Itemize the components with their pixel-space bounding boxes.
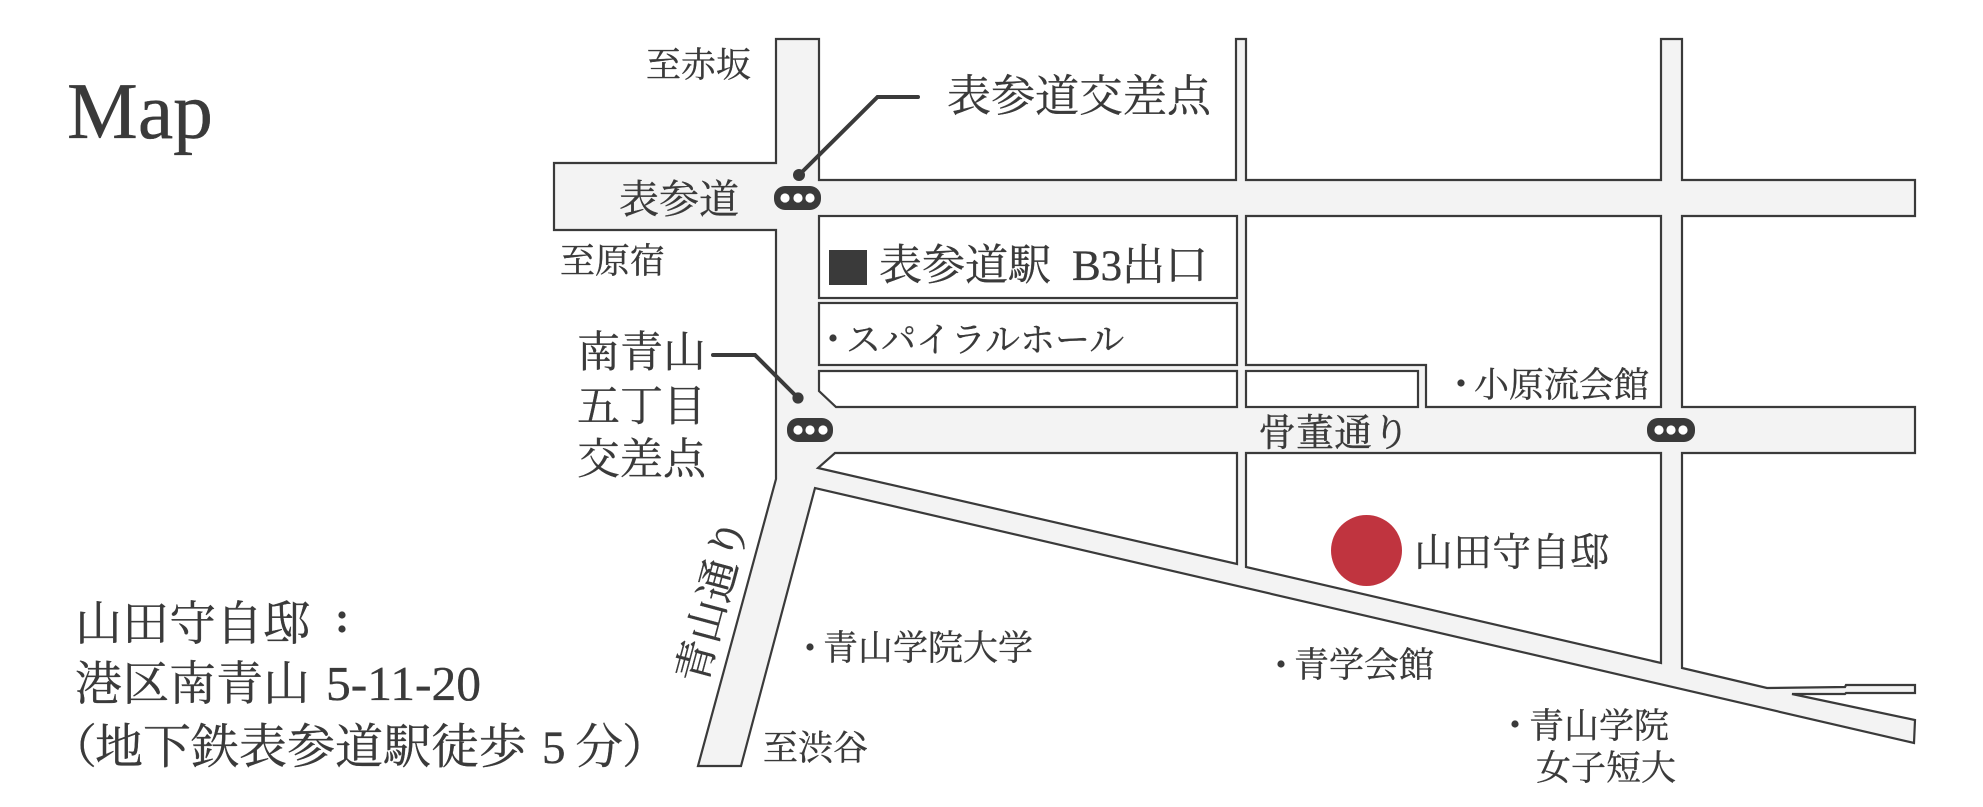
label: Aoyama-dori: 青山通り xyxy=(670,514,758,688)
address line 3: ） xyxy=(622,722,669,774)
address block xyxy=(50,599,669,774)
label: station exit: 出口 xyxy=(1122,243,1208,290)
label: Ohara Kaikan: 小原流会館 xyxy=(1474,366,1649,405)
label: Omotesando crossing: 表参道交差点 xyxy=(947,72,1212,121)
label: Aoyama Gakuin Women's Junior College xyxy=(1511,707,1676,788)
address line 3: 分 xyxy=(575,721,623,774)
address line 3: 地下鉄表参道駅徒歩 xyxy=(95,721,527,774)
label: Minami-Aoyama 5-chome crossing: 五丁目 xyxy=(577,384,706,431)
destination marker xyxy=(1331,515,1402,586)
traffic signal: Kotto-dori east xyxy=(1647,418,1695,442)
address line 3: 5 xyxy=(542,722,566,774)
address line 2 xyxy=(75,656,481,711)
label: Aoyama Gakuin Women's Junior College: 女子短大 xyxy=(1536,749,1676,788)
label: Minami-Aoyama 5-chome crossing: 南青山 xyxy=(577,330,706,377)
label: Kotto-dori: 骨董通り xyxy=(1258,413,1410,455)
label: station exit: B3 xyxy=(1072,243,1122,290)
label: Seigaku Kaikan: 青学会館 xyxy=(1294,646,1434,685)
block: chamfered corner xyxy=(819,371,1237,407)
label: Yamada residence: 山田守自邸 xyxy=(1414,532,1609,575)
road map xyxy=(554,39,1915,766)
address line 2: 港区南青山 xyxy=(75,659,310,711)
block: lower left wedge xyxy=(818,453,1237,564)
label: to Akasaka: 至赤坂 xyxy=(646,46,751,85)
roads xyxy=(554,39,1915,766)
block: lower right wedge xyxy=(1246,453,1661,663)
label: to Shibuya: 至渋谷 xyxy=(763,729,868,768)
traffic signal: Omotesando crossing xyxy=(774,186,821,210)
label: Aoyama Gakuin Women's Junior College: 青山学院 xyxy=(1529,707,1669,746)
title: Map xyxy=(67,68,213,156)
traffic signal: Minami-Aoyama 5-chome crossing xyxy=(787,418,833,442)
leader line: Omotesando crossing xyxy=(793,97,918,181)
address line 2: 5-11-20 xyxy=(326,656,481,711)
label: Minami-Aoyama 5-chome crossing: 交差点 xyxy=(577,437,707,484)
label: station exit xyxy=(879,243,1208,290)
label: to Harajuku: 至原宿 xyxy=(560,242,665,281)
label: Minami-Aoyama 5-chome crossing xyxy=(577,330,707,484)
label: station exit: 表参道駅 xyxy=(879,243,1051,290)
label: Omotesando road: 表参道 xyxy=(619,177,739,222)
block: spiral hall xyxy=(819,303,1237,365)
address line 3: （ xyxy=(50,722,97,774)
station exit marker xyxy=(829,250,867,285)
block: station exit xyxy=(819,216,1237,298)
block: upper right L-shape xyxy=(1246,216,1661,407)
address line 3 xyxy=(50,721,669,774)
block: small lot xyxy=(1246,371,1418,407)
label: Aoyama Gakuin University: 青山学院大学 xyxy=(823,629,1033,668)
label: Spiral Hall: スパイラルホール xyxy=(846,321,1124,360)
leader line: Minami-Aoyama crossing xyxy=(713,355,804,404)
address line 1: 山田守自邸 xyxy=(75,599,310,651)
